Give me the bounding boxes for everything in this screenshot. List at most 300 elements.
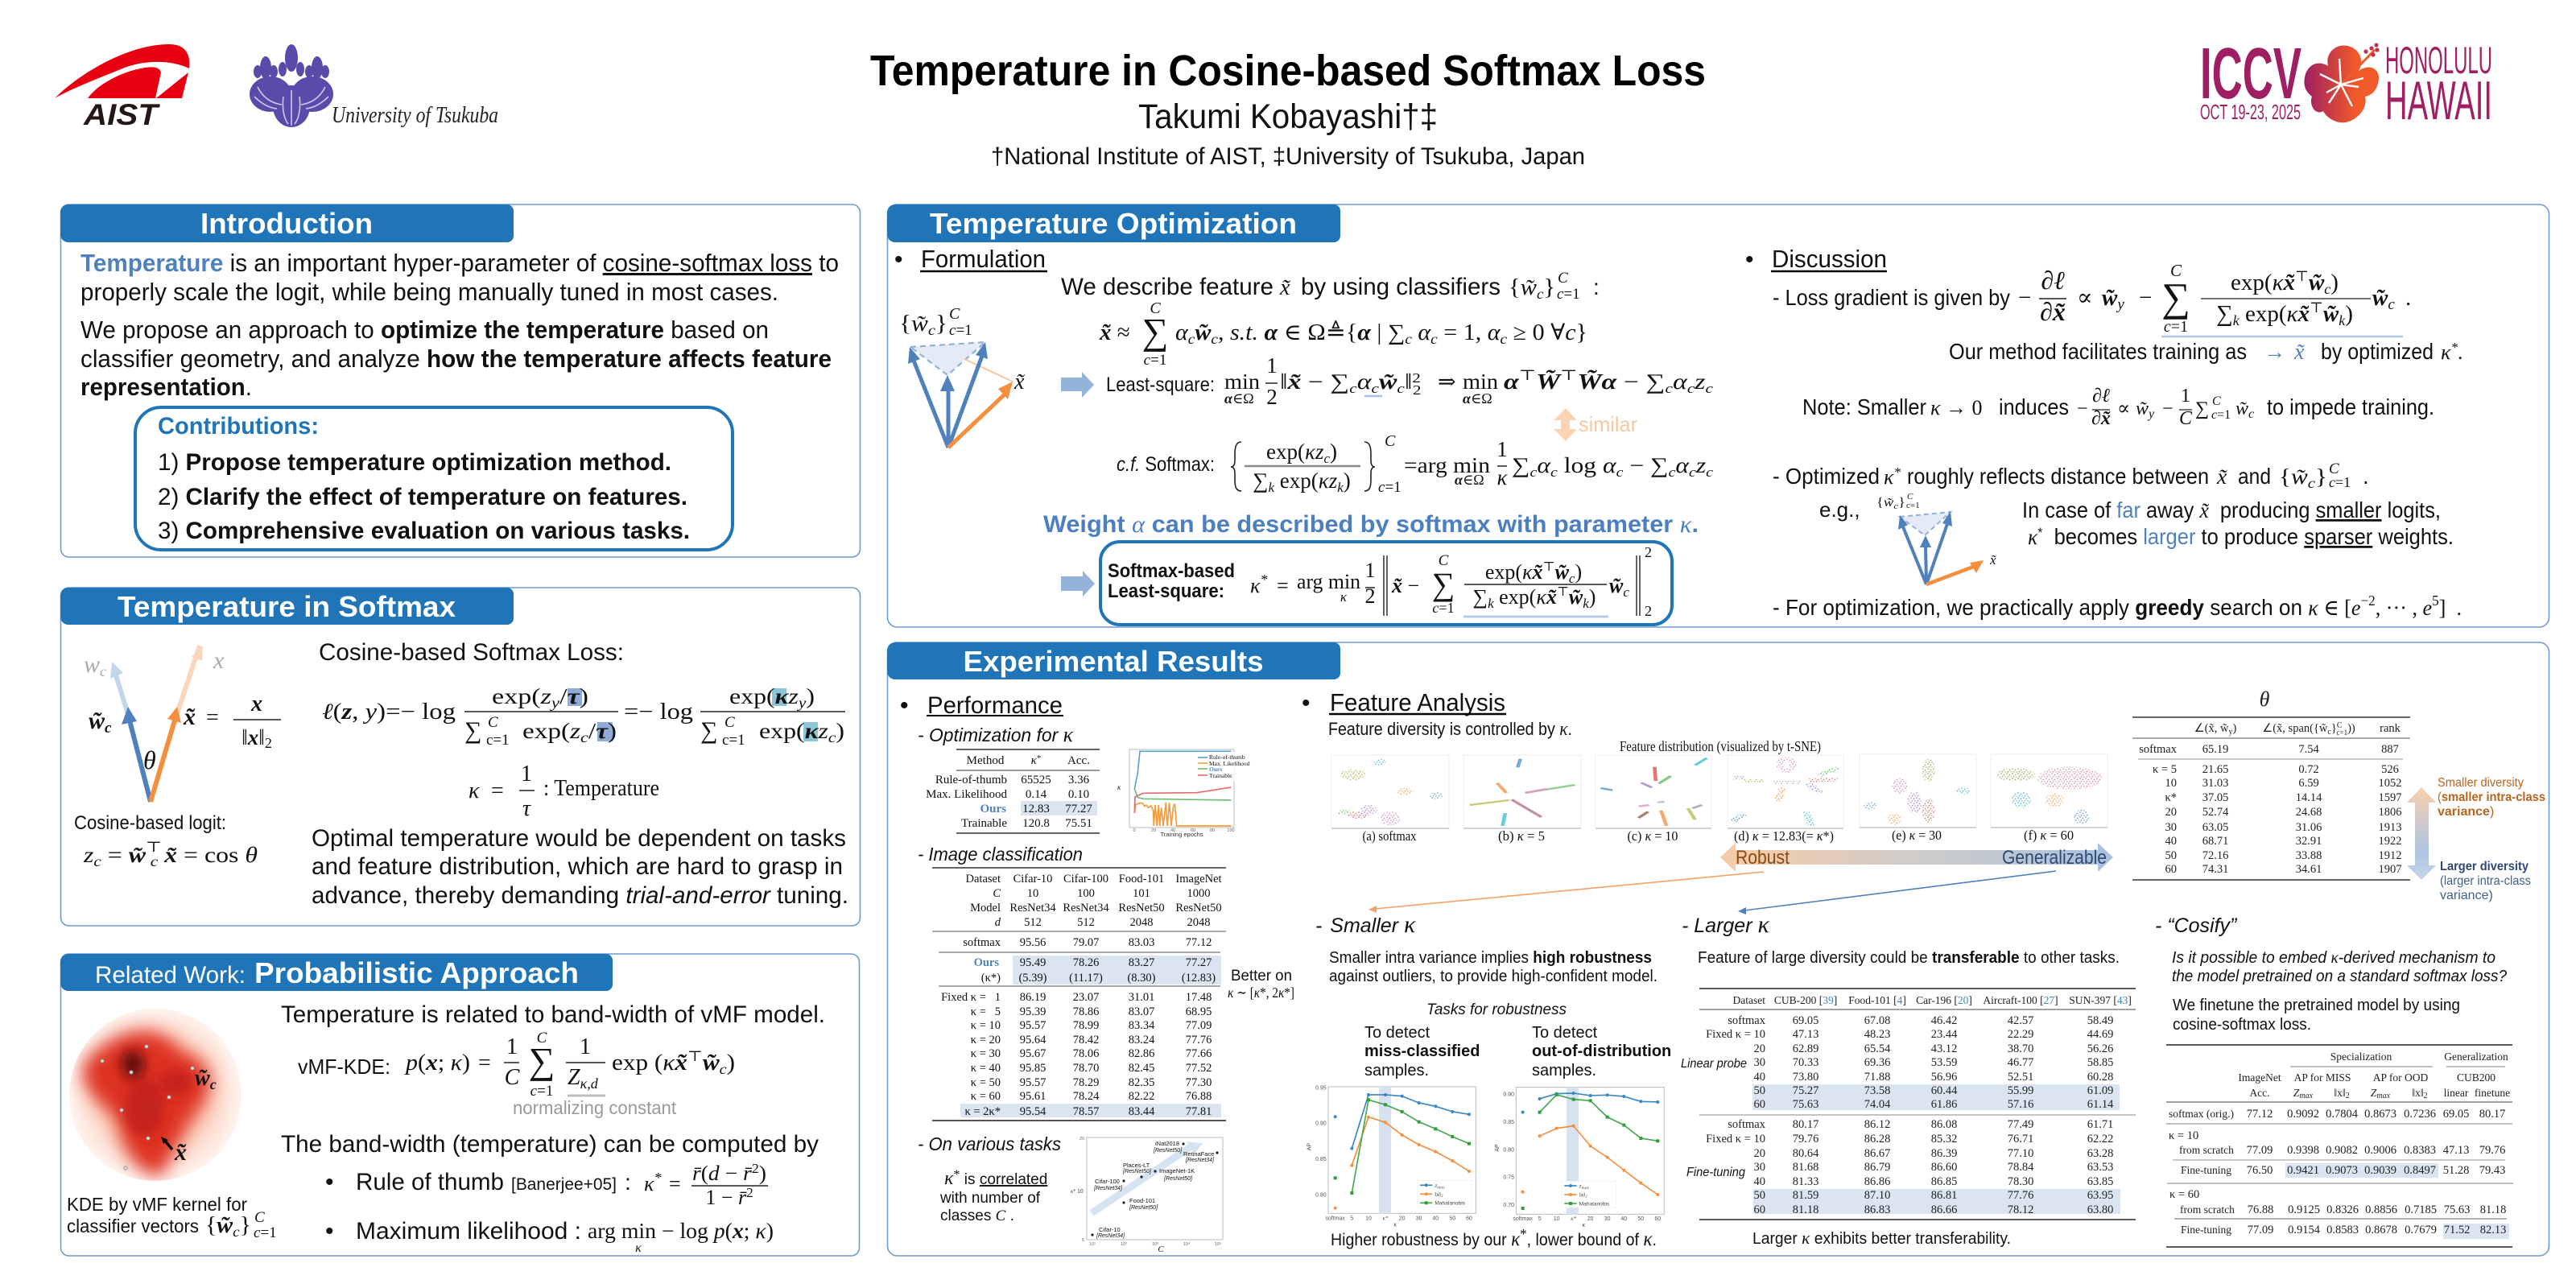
table: transfer performance: 63.53: [2087, 1161, 2113, 1174]
diagram: classifier vectors and feature: [899, 305, 1026, 448]
table: cosify results: 0.8678: [2365, 1224, 2397, 1236]
table: cosify results: CUB200: [2457, 1071, 2496, 1084]
table: transfer performance: 73.80: [1793, 1071, 1818, 1084]
table: angle and rank: κ*: [2165, 791, 2177, 804]
text: greedy search: −2: [2361, 592, 2376, 609]
formula: loss gradient: ∂ℓ: [2041, 266, 2065, 295]
formula: least-square: ⇒: [1438, 369, 1456, 394]
table: transfer performance: 57.16: [2008, 1098, 2033, 1111]
table: image classification: d: [995, 916, 1001, 929]
table: transfer performance: 30: [1753, 1056, 1765, 1069]
formula: vMF-KDE: ): [727, 1051, 735, 1075]
chart: AP for out-of-distribution detection: z: [1579, 1183, 1582, 1190]
text: cosine-based logit: c: [151, 853, 158, 869]
diagram: vectors w and x with angle theta: x̃: [183, 704, 196, 730]
callout: contributions: Contributions:: [158, 413, 319, 440]
table: cosify results: max: [2376, 1092, 2391, 1100]
callout: softmax-based least-square: w̃: [1569, 585, 1583, 609]
arrow: robust to smaller kappa: [1368, 872, 1764, 913]
table: cosify results: AP for MISS: [2294, 1071, 2351, 1084]
table: image classification: 95.54: [1020, 1105, 1046, 1118]
table: cosify results: 82.13: [2480, 1224, 2506, 1236]
chart: kappa over training epochs: Rule-of-thumb: [1209, 753, 1245, 761]
formula: cosine softmax loss: exp( z: [492, 684, 549, 708]
affiliations: †National Institute of AIST, ‡University of Tsukuba, Japan: [991, 143, 1585, 170]
heading: Experimental Results: [887, 642, 1340, 679]
table: cosify results: 0.7185: [2405, 1203, 2437, 1216]
table: transfer performance: softmax: [1728, 1118, 1766, 1131]
callout: softmax-based least-square: c=1: [1432, 600, 1455, 616]
callout: softmax-based least-square: x̃ −: [1391, 574, 1419, 597]
text: detect out-of-distribution: [1532, 1024, 1671, 1080]
list item: rule of thumb: *: [654, 1170, 661, 1186]
formula: linear combination: c: [1211, 331, 1218, 347]
formula: softmax as argmin: κz: [1319, 469, 1338, 493]
diagram: vectors w and x with angle theta: θ: [143, 745, 156, 774]
chart: kappa over training epochs: κ: [1117, 783, 1121, 791]
formula: softmax as argmin: c: [1669, 464, 1676, 480]
chart: kappa vs number of classes: iNat2018: [1155, 1140, 1179, 1147]
formula: softmax as argmin: ): [1330, 440, 1337, 464]
table: angle and rank: 14.14: [2296, 791, 2322, 804]
text: correlated with classes: [939, 1168, 1047, 1224]
table: image classification: 512: [1077, 916, 1095, 929]
text: cosine-based logit: x̃: [158, 843, 177, 867]
table: cosify results: 47.13: [2443, 1144, 2469, 1157]
chart: kappa vs number of classes: [ResNet50]: [1122, 1169, 1152, 1174]
list item: rule of thumb: •: [325, 1169, 334, 1195]
table: angle and rank: rank: [2380, 722, 2401, 735]
formula: vMF-KDE: [298, 1030, 735, 1100]
text: note on smaller kappa: y: [2147, 407, 2155, 421]
diagram: far away feature: [1876, 492, 1996, 584]
formula: loss gradient: .: [2405, 285, 2411, 311]
logo: ICCV 2025 Honolulu Hawaii: ICCV: [2200, 34, 2301, 114]
table: angle and rank: 31.03: [2202, 777, 2228, 790]
diagram: far away feature: {w̃: [1876, 496, 1893, 510]
list item: rule of thumb: r̄(d − r̄: [692, 1162, 751, 1185]
table: angle and rank: 30: [2165, 821, 2177, 834]
formula: loss gradient: k: [2233, 312, 2240, 328]
table: image classification: 82.22: [1129, 1090, 1154, 1103]
formula: vMF-KDE: c=1: [530, 1083, 553, 1100]
chart: kappa over training epochs: [1117, 749, 1250, 838]
formula: cosine softmax loss: exp( κz: [759, 719, 827, 743]
table: cosify results: Z: [2371, 1087, 2377, 1099]
table: angle and rank: κ = 5: [2153, 763, 2177, 776]
formula: linear combination: = 1,: [1438, 320, 1488, 345]
callout: softmax-based least-square: ∑: [1473, 585, 1488, 609]
table: angle and rank: ∠(x̃, span({w̃: [2262, 722, 2328, 735]
table: transfer performance: 23.44: [1931, 1028, 1958, 1041]
formula: cosine softmax loss: τ): [567, 684, 587, 708]
text: correlated with classes: is: [960, 1171, 980, 1188]
chart: kappa vs number of classes: [ResNet34]: [1093, 1186, 1123, 1191]
table: image classification: κ = 5: [971, 1005, 1001, 1018]
table: transfer performance: 65.54: [1864, 1042, 1891, 1055]
text: optimized kappa reflects distance: }: [2315, 464, 2327, 489]
text: cosine-based logit: = cos θ: [183, 843, 256, 867]
formula: softmax as argmin: c: [1550, 464, 1558, 480]
table: image classification: ResNet34: [1063, 902, 1109, 914]
table: cosify results: 0.7679: [2405, 1224, 2437, 1236]
table: transfer performance: 86.08: [1931, 1118, 1957, 1131]
table: image classification: softmax: [963, 936, 1001, 949]
text: note on smaller kappa: ∝: [2117, 398, 2130, 419]
table: image classification: 95.57: [1020, 1076, 1046, 1089]
chart: kappa vs number of classes: 10⁴: [1183, 1241, 1191, 1247]
chart: t-SNE kappa 5: [1463, 755, 1581, 844]
text: optimized kappa reflects distance: [1773, 460, 2369, 491]
text: cosine-based logit: w̃: [129, 843, 147, 867]
text: describe feature: [1061, 270, 1600, 303]
formula: linear combination: α: [1175, 320, 1189, 345]
table: transfer performance: 53.59: [1931, 1056, 1957, 1069]
formula: kappa equals one over tau: 1: [521, 762, 532, 786]
table: angle and rank: 37.05: [2202, 791, 2228, 804]
table: cosify results: 77.12: [2247, 1108, 2273, 1121]
formula: cosine softmax loss: ): [806, 684, 815, 708]
table: angle and rank: 1922: [2378, 835, 2402, 848]
text: note on smaller kappa: κ → 0: [1930, 396, 1982, 419]
table: image classification: (8.30): [1127, 972, 1156, 985]
heading: Temperature in Softmax: [60, 588, 514, 625]
logo: University of Tsukuba: University of Tsukuba: [332, 102, 498, 128]
table: angle and rank: 65.19: [2202, 743, 2228, 756]
callout: softmax-based least-square: C: [1439, 552, 1449, 569]
text: weight statement: Weight α can be described by softmax with parameter κ.: [1043, 511, 1699, 538]
chart: AP for out-of-distribution detection: 20: [1587, 1216, 1594, 1222]
table: angle and rank: 63.05: [2202, 821, 2228, 834]
text: detect miss-classified: To detect: [1364, 1024, 1430, 1042]
text: KDE caption: KDE by vMF kernel for: [67, 1194, 247, 1215]
text: larger kappa transferability: Larger κ exhibits better transferability.: [1752, 1228, 2011, 1248]
text: finetune answer: cosine-softmax loss.: [2173, 1016, 2311, 1034]
table: angle and rank: 72.16: [2202, 849, 2228, 862]
text: note on smaller kappa: c: [2248, 407, 2254, 421]
table: cosify results: 0.8383: [2404, 1144, 2436, 1157]
subheading: Image classification: - Image classification: [918, 844, 1083, 865]
section: Cosify: [2155, 914, 2513, 1247]
table: cosify results: 0.9073: [2326, 1164, 2358, 1177]
table: angle and rank: C: [2337, 721, 2343, 730]
text: note on smaller kappa: w̃: [2235, 398, 2248, 419]
chart: AP for out-of-distribution detection: 30: [1604, 1216, 1611, 1222]
subheading: Smaller kappa: - Smaller κ: [1315, 911, 1416, 938]
table: cosify results: ‖x‖: [2334, 1087, 2346, 1099]
table: transfer performance: 86.85: [1931, 1175, 1957, 1188]
diagram: classifier vectors and feature: c=1: [949, 322, 972, 339]
text: optimized kappa reflects distance: {w̃: [2279, 464, 2306, 489]
formula: loss gradient: c: [2388, 296, 2395, 313]
panel: Introduction: [60, 204, 860, 557]
text: optimal temperature: [312, 825, 848, 909]
chart: kappa over training epochs: 60: [1191, 828, 1195, 833]
diagram: vectors w and x with angle theta: c: [105, 720, 112, 737]
table: image classification: C: [993, 887, 1001, 900]
table: cosify results: Generalization: [2444, 1051, 2508, 1063]
formula: linear combination: C: [1150, 299, 1161, 317]
chart: AP for out-of-distribution detection: 2: [1585, 1195, 1587, 1199]
annotation: similar: similar: [1579, 412, 1637, 436]
chart: kappa over training epochs: 0: [1133, 828, 1136, 833]
table: image classification: 77.52: [1186, 1062, 1212, 1075]
chart: kappa vs number of classes: [1071, 1137, 1223, 1254]
formula: softmax as argmin: c: [1323, 451, 1330, 466]
text: describe feature: x̃: [1279, 275, 1291, 300]
table: cosify results: 0.9421: [2287, 1164, 2319, 1177]
formula: vMF-KDE: C: [505, 1065, 520, 1090]
text: far away explanation: In case of far away x̃ producing smaller logits,: [2022, 497, 2441, 522]
table: kappa optimization: Ours: [980, 803, 1006, 815]
diagram: vectors w and x with angle theta: [84, 646, 281, 802]
table: angle and rank: 1597: [2378, 791, 2402, 804]
table: transfer performance: softmax: [1728, 1014, 1766, 1027]
text: smaller intra variance: Smaller intra variance implies high robustness: [1329, 949, 1652, 967]
formula: softmax as argmin: c: [1530, 464, 1538, 480]
table: transfer performance: 71.88: [1864, 1071, 1890, 1084]
table: image classification: 77.27: [1186, 956, 1212, 969]
formula: least-square: c: [1349, 381, 1357, 396]
text: KDE caption: {w̃: [205, 1213, 232, 1238]
table: transfer performance: 87.10: [1864, 1189, 1890, 1202]
panel: Related Work: [60, 954, 860, 1256]
formula: least-square: c: [1397, 381, 1405, 396]
text: higher robustness: *: [1520, 1226, 1527, 1242]
text: greedy search: 5: [2432, 592, 2439, 609]
callout: contributions: 3) Comprehensive evaluation on various tasks.: [158, 518, 690, 544]
chart: kappa vs number of classes: κ* 10: [1071, 1188, 1084, 1195]
text: KDE caption: }: [240, 1213, 251, 1238]
table: image classification: 78.26: [1073, 956, 1099, 969]
formula: loss gradient: ∑: [2161, 275, 2190, 320]
table: cosify results: 0.9006: [2364, 1144, 2396, 1157]
table: angle and rank: 0.72: [2298, 763, 2319, 776]
text: detect out-of-distribution: To detect: [1532, 1024, 1598, 1042]
table: transfer performance: 69.05: [1793, 1014, 1818, 1027]
text: our method facilitates: x̃: [2293, 340, 2306, 365]
annotation: similar: [1554, 408, 1637, 441]
table: kappa optimization: *: [1037, 753, 1041, 763]
table: cosify results: 0.7236: [2404, 1108, 2436, 1121]
table: image classification: 77.66: [1186, 1047, 1212, 1060]
formula: cosine softmax loss: exp( κz: [729, 684, 797, 708]
text: note on smaller kappa: to impede training.: [2267, 394, 2434, 419]
text: cosine-based logit: =: [101, 843, 129, 867]
table: transfer performance: 48.23: [1864, 1028, 1890, 1041]
table: image classification: 78.06: [1073, 1047, 1099, 1060]
formula: least-square: Least-square:: [1106, 374, 1215, 396]
diagram: far away feature: c=1: [1906, 501, 1920, 510]
annotation: better on: κ ∼ [κ*, 2κ*]: [1228, 985, 1294, 1001]
table: transfer performance: 78.84: [2008, 1161, 2034, 1174]
subheading: Formulation: •: [894, 246, 903, 273]
text: note on smaller kappa: w̃: [2136, 398, 2149, 419]
table: angle and rank: 34.61: [2296, 863, 2322, 876]
table: cosify results: 0.8583: [2326, 1224, 2359, 1236]
formula: kappa equals one over tau: =: [491, 778, 504, 803]
table: transfer performance: 86.86: [1864, 1175, 1890, 1188]
table: image classification: κ = 10: [971, 1019, 1001, 1032]
callout: softmax-based least-square: [1100, 542, 1672, 625]
formula: softmax as argmin: exp(: [1274, 469, 1319, 493]
formula: cosine softmax loss: τ): [596, 719, 615, 743]
table: transfer performance: 61.71: [2087, 1118, 2113, 1131]
table: angle and rank: 32.91: [2296, 835, 2322, 848]
table: image classification: 83.34: [1129, 1019, 1155, 1032]
table: angle and rank: 50: [2165, 849, 2177, 862]
table: transfer performance: 80.64: [1793, 1147, 1819, 1160]
table: transfer performance: 63.95: [2087, 1189, 2113, 1202]
formula: linear combination: [1099, 299, 1587, 369]
table: kappa optimization: Method: [967, 754, 1005, 767]
chart: kappa over training epochs: 80: [1210, 828, 1215, 833]
table: image classification: 68.95: [1186, 1005, 1212, 1018]
table: transfer performance: 46.42: [1931, 1014, 1957, 1027]
formula: least-square: c: [1666, 381, 1674, 396]
table: transfer performance: 52.51: [2008, 1071, 2033, 1084]
text: far away explanation: becomes: [2042, 524, 2143, 549]
table: angle and rank: 1913: [2378, 821, 2402, 834]
formula: least-square: c: [1687, 381, 1695, 396]
table: image classification: 17.48: [1186, 991, 1212, 1004]
formula: softmax as argmin: α: [1675, 453, 1690, 477]
table: transfer performance: 81.33: [1793, 1175, 1818, 1188]
text: temperature intro: We propose an approach to optimize the temperature based on: [80, 316, 769, 344]
table: transfer performance: 60: [1753, 1203, 1765, 1216]
table: transfer performance: 61.09: [2087, 1084, 2113, 1097]
callout: softmax-based least-square: *: [1260, 572, 1267, 588]
text: finetune answer: We finetune the pretrained model by using: [2173, 997, 2460, 1014]
heading: Related Work Probabilistic Approach: Probabilistic Approach: [254, 956, 579, 989]
table: transfer performance: 69.36: [1864, 1056, 1890, 1069]
table: transfer performance: CUB-200 [39]: [1774, 994, 1837, 1006]
formula: loss gradient: c=1: [2164, 318, 2188, 336]
panel: Experimental Results: [887, 642, 2549, 1256]
formula: loss gradient: w̃: [2372, 285, 2388, 311]
text: tasks for robustness: Tasks for robustness: [1426, 1001, 1567, 1018]
arrow: smaller to larger diversity: [2407, 787, 2436, 880]
subheading: Discussion: Discussion: [1772, 245, 1887, 273]
formula: vMF-KDE: p(x; κ): [404, 1051, 470, 1075]
formula: loss gradient: [1773, 261, 2411, 336]
table: cosify results: 0.9092: [2287, 1108, 2319, 1121]
text: question: the model pretrained on a standard softmax loss?: [2172, 968, 2508, 985]
formula: least-square: 2: [1412, 370, 1421, 386]
callout: softmax-based least-square: arg min: [1297, 570, 1360, 593]
formula: vMF-KDE: ⊤: [687, 1048, 703, 1064]
chart: AP for out-of-distribution detection: softmax: [1513, 1216, 1533, 1222]
author: Takumi Kobayashi†‡: [1138, 97, 1438, 136]
text: question: Is it possible to embed κ-derived mechanism to: [2172, 949, 2496, 967]
logo: AIST: [55, 44, 189, 131]
chart: AP for out-of-distribution detection: 10: [1554, 1216, 1560, 1222]
table: transfer performance: 22.29: [2008, 1028, 2033, 1041]
table: image classification: 83.03: [1129, 936, 1154, 949]
logo: ICCV 2025 Honolulu Hawaii: OCT 19-23, 2025: [2200, 100, 2301, 124]
diagram: classifier vectors and feature: }: [935, 312, 947, 336]
table: transfer performance: 47.13: [1793, 1028, 1818, 1041]
chart: kappa vs number of classes: [ResNet34]: [1096, 1233, 1125, 1239]
text: higher robustness: , lower bound of: [1527, 1231, 1643, 1249]
annotation: larger diversity: variance): [2440, 889, 2493, 902]
list item: rule of thumb: ): [759, 1162, 766, 1185]
chart: kappa vs number of classes: Places-LT: [1123, 1162, 1150, 1169]
formula: kappa equals one over tau: : Temperature: [543, 776, 659, 801]
diagram: vectors w and x with angle theta: c: [100, 663, 106, 679]
text: question: [2172, 949, 2508, 985]
table: transfer performance: 79.76: [1793, 1133, 1818, 1146]
table: transfer performance: 86.39: [1931, 1147, 1957, 1160]
text: optimal temperature: Optimal temperature would be dependent on tasks: [312, 825, 846, 852]
formula: cosine softmax loss: /: [559, 684, 568, 708]
text: KDE caption: [67, 1194, 277, 1241]
table: transfer performance: 76.71: [2008, 1133, 2033, 1146]
formula: least-square: min: [1224, 369, 1261, 394]
table: transfer performance: 60: [1753, 1098, 1765, 1111]
logo: ICCV 2025 Honolulu Hawaii: [2200, 34, 2492, 131]
text: KDE caption: c=1: [254, 1224, 277, 1241]
table: image classification: 78.86: [1073, 1005, 1099, 1018]
formula: linear combination: s.t. α ∈ Ω≜{α | ∑: [1230, 320, 1402, 345]
table: cosify results: κ = 60: [2169, 1188, 2199, 1201]
list item: maximum likelihood: arg min − log p(x; κ): [588, 1219, 774, 1243]
table: image classification: 82.35: [1129, 1076, 1154, 1089]
diagram: classifier vectors and feature: c: [928, 322, 935, 338]
table: transfer performance: 61.86: [1931, 1098, 1957, 1111]
callout: softmax-based least-square: k: [1488, 596, 1494, 611]
table: transfer performance: 43.12: [1931, 1042, 1957, 1055]
table: kappa optimization: Trainable: [961, 817, 1007, 830]
table: angle and rank: 6.59: [2298, 777, 2319, 790]
chart: AP for miss-classified detection: 0.85: [1315, 1157, 1327, 1162]
table: transfer performance: 46.77: [2008, 1056, 2033, 1069]
table: transfer performance: 60.28: [2087, 1071, 2113, 1084]
formula: least-square: w̃: [1379, 369, 1398, 394]
text: note on smaller kappa: [1802, 386, 2434, 429]
table: transfer performance: 70.33: [1793, 1056, 1818, 1069]
formula: cosine softmax loss: ∑: [464, 717, 481, 744]
arrow: robust to generalizable: Generalizable: [2002, 847, 2107, 869]
table: transfer performance: 73.58: [1864, 1084, 1890, 1097]
chart: AP for out-of-distribution detection: 0.80: [1503, 1147, 1514, 1153]
chart: AP for out-of-distribution detection: 0.70: [1503, 1203, 1514, 1208]
table: cosify results: ‖x‖: [2412, 1087, 2424, 1099]
table: angle and rank: softmax: [2139, 743, 2178, 756]
text: detect out-of-distribution: samples.: [1532, 1062, 1596, 1080]
table: cosify results: linear: [2444, 1087, 2469, 1099]
text: temperature intro: Temperature is an important hyper-parameter of cosine-softmax loss to: [80, 250, 839, 277]
text: optimized kappa reflects distance: c=1: [2329, 474, 2351, 490]
table: kappa optimization: 65525: [1021, 774, 1051, 786]
table: transfer performance: [1681, 989, 2136, 1220]
table: image classification: 2048: [1187, 916, 1211, 929]
table: image classification: 79.07: [1073, 936, 1099, 949]
annotation: smaller diversity: variance): [2438, 805, 2494, 819]
table: angle and rank: 68.71: [2202, 835, 2228, 848]
table: transfer performance: 81.18: [1793, 1203, 1818, 1216]
table: image classification: 82.45: [1129, 1062, 1154, 1075]
annotation: smaller diversity: Smaller diversity: [2438, 776, 2524, 790]
subheading: Formulation: Formulation: [921, 245, 1046, 273]
table: angle and rank: ): [2232, 722, 2236, 735]
text: note on smaller kappa: Note: Smaller: [1802, 394, 1926, 419]
heading: Experimental Results: Experimental Results: [963, 645, 1264, 678]
text: KDE caption: classifier vectors: [67, 1216, 199, 1236]
formula: cosine softmax loss: c=1: [722, 732, 745, 749]
formula: loss gradient: exp(κx̃: [2231, 270, 2295, 295]
chart: kappa vs number of classes: 10³: [1152, 1242, 1158, 1247]
